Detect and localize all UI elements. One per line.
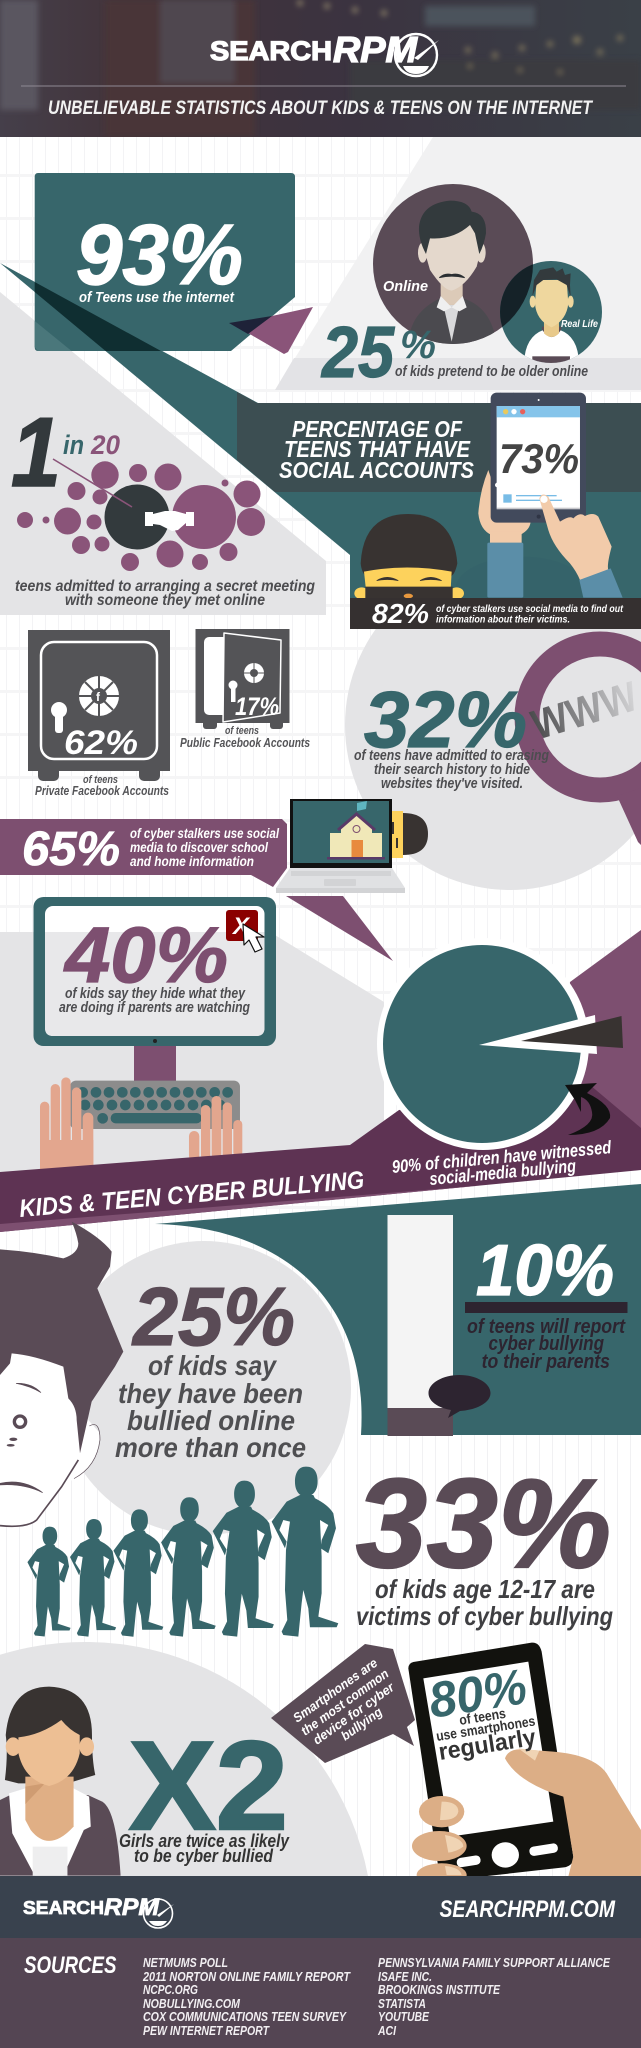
73% figure: 73% [499, 435, 579, 482]
panel: 10% will report: cyber bullying [488, 1333, 604, 1355]
bar gauge 10% [388, 1215, 453, 1436]
banner: 65% of cyber stalkers: 65% [22, 823, 120, 876]
stat: 32% erased history: 32% [364, 675, 527, 764]
monitor: 40% hide what they do [34, 897, 276, 1081]
man illustration [408, 201, 497, 347]
icon: handshake [145, 511, 194, 531]
sleeves [487, 543, 523, 598]
sources column two: ACI [377, 2023, 396, 2038]
footer logo [23, 1894, 174, 1928]
sources column two: YOUTUBE [378, 2009, 429, 2024]
93% caption: of Teens use the internet [79, 290, 235, 306]
stat: 1 in 20: in [63, 430, 84, 460]
stat: 25% bullied online: 25% [131, 1270, 295, 1363]
keyboard and hands [40, 1077, 242, 1169]
phone held in hand [408, 1643, 641, 1887]
heading: kids and teen cyber bullying: KIDS & TEEN CYBER BULLYING [18, 1166, 365, 1223]
safe: public facebook accounts 17%: 17% [235, 693, 279, 721]
large grey circle 32% backdrop [345, 560, 641, 890]
stat: 32% erased history [354, 675, 549, 792]
monitor: 40% hide what they do: 40% [63, 910, 228, 999]
stat: 33% victims: 33% [356, 1453, 611, 1594]
monitor: 40% hide what they do: of kids say they hide what they [65, 985, 246, 1002]
grey panel: secret meeting backdrop [0, 292, 326, 615]
icon: close button with cursor [226, 910, 264, 952]
caption: secret meeting [15, 578, 315, 609]
stat: 25% pretend older: % [400, 323, 436, 367]
stat: girls x2: Girls are twice as likely [119, 1830, 290, 1851]
sources column one [142, 1955, 351, 2038]
speech bubble: smartphones: bullying [338, 1704, 385, 1743]
stat: 25% bullied online: more than once [115, 1432, 306, 1463]
logo [210, 29, 439, 76]
sources column one: NOBULLYING.COM [143, 1996, 241, 2011]
speech bubble: smartphones: Smartphones are [290, 1655, 380, 1725]
sources column one: 2011 NORTON ONLINE FAMILY REPORT [142, 1969, 351, 1984]
stat: 25% bullied online: bullied online [127, 1405, 295, 1436]
stat: 80% on phone screen: 80% [425, 1658, 531, 1729]
safe: public facebook accounts 17%: of teens [225, 725, 259, 737]
safe: public facebook accounts 17%: Public Facebook Accounts [180, 736, 310, 750]
sources column one: PEW INTERNET REPORT [143, 2023, 270, 2038]
caption: 90% witnessed: social-media bullying [429, 1156, 577, 1189]
icon: speech bubble [428, 1375, 490, 1418]
stat: 25% pretend older: of kids pretend to be older online [395, 364, 588, 380]
sources heading: SOURCES [24, 1952, 116, 1979]
silhouettes: six kids [27, 1467, 338, 1637]
stat: 25% bullied online: of kids say [148, 1350, 277, 1381]
bubble cluster with handshake [17, 459, 265, 571]
header photo backdrop [0, 0, 641, 137]
banner: 65% of cyber stalkers: of cyber stalkers use social [130, 825, 280, 841]
footer logo: SEARCH [23, 1898, 104, 1918]
safe: private facebook accounts 62%: f [96, 690, 101, 704]
ninja stalker [354, 514, 464, 599]
panel: 10% will report: of teens will report [467, 1316, 626, 1338]
right hand [189, 1096, 242, 1161]
stat: 25% bullied online [115, 1270, 306, 1463]
stat: 32% erased history: of teens have admitted to erasing [354, 747, 549, 764]
stat: 80% on phone screen: use smartphones [435, 1712, 536, 1744]
safe: private facebook accounts 62%: of teens [83, 774, 118, 786]
banner: 65% of cyber stalkers: media to discover school [130, 839, 269, 855]
tablet body [491, 393, 586, 523]
tablet with hands [455, 393, 623, 623]
boy illustration [524, 267, 579, 363]
caption: 90% witnessed [391, 1137, 613, 1189]
stat: 25% pretend older [320, 313, 588, 393]
left hand [40, 1077, 93, 1169]
banner: 65% of cyber stalkers: and home information [130, 853, 254, 869]
stat: girls x2: to be cyber bullied [134, 1845, 274, 1866]
stat: 80% on phone screen [425, 1658, 538, 1766]
left hand [478, 470, 531, 535]
sources column one: NCPC.ORG [143, 1982, 198, 1997]
banner: 65% of cyber stalkers [0, 819, 287, 887]
safe: public facebook accounts 17% [180, 629, 310, 750]
heading: SOCIAL ACCOUNTS [279, 457, 475, 483]
footer: sources [0, 1938, 641, 2048]
stat: girls x2: X2 [129, 1715, 288, 1856]
speech bubble: smartphones: the most common [298, 1666, 391, 1738]
label: real life: Real Life [561, 318, 598, 330]
safe: private facebook accounts 62%: 62% [64, 724, 138, 762]
heading [279, 416, 475, 483]
stat: 33% victims: of kids age 12-17 are [375, 1574, 595, 1604]
right hand [539, 495, 612, 580]
speech bubble: smartphones: device for cyber [310, 1679, 398, 1747]
safe: private facebook accounts 62%: Private Facebook Accounts [35, 784, 169, 798]
panel: 10% will report: 10% [476, 1231, 614, 1311]
purple speech tail [286, 896, 393, 961]
logo: RPM [333, 29, 418, 70]
panel: 10% will report [155, 1184, 641, 1436]
illustration: sad boy head [0, 1222, 123, 1526]
stat: 1 in 20 [11, 397, 120, 507]
speech bubble: smartphones [271, 1644, 415, 1763]
purple diagonal band [0, 930, 641, 1232]
stat: 1 in 20: 20 [90, 430, 120, 460]
stat: 32% erased history: their search history to hide [374, 761, 530, 778]
pie chart: 90% witnessed bullying [377, 938, 623, 1150]
bar: 82% cyber stalkers: information about their victims. [436, 614, 570, 626]
stat: 25% pretend older: 25 [320, 313, 395, 393]
safe: private facebook accounts 62% [28, 630, 170, 798]
sources column two: STATISTA [378, 1996, 426, 2011]
header banner [0, 0, 641, 137]
icon: close button with cursor: X [231, 913, 251, 940]
icon: magnifying glass with www [526, 644, 641, 845]
teal diagonal band [0, 263, 641, 629]
heading: PERCENTAGE OF [292, 416, 463, 442]
circle: real life persona [500, 261, 602, 363]
hand [505, 1749, 641, 1877]
icon: ninja peeking behind laptop [392, 811, 428, 858]
logo: SEARCH [210, 36, 332, 66]
caption: secret meeting: with someone they met online [65, 592, 265, 609]
stat: 80% on phone screen: regularly [437, 1724, 538, 1766]
stat: 32% erased history: websites they've visited. [381, 775, 523, 792]
bar: 82% cyber stalkers [350, 598, 641, 629]
93% figure: 93% [76, 208, 243, 303]
heading: TEENS THAT HAVE [284, 436, 471, 462]
circle: online persona [373, 184, 533, 347]
stat: 25% bullied online: they have been [118, 1378, 303, 1409]
panel: percentage of teens with social accounts [237, 392, 641, 492]
sources column two: BROOKINGS INSTITUTE [378, 1982, 500, 1997]
label: online: Online [383, 278, 428, 295]
caption: secret meeting: teens admitted to arranging a secret meeting [15, 578, 315, 595]
monitor: 40% hide what they do: are doing if parents are watching [59, 999, 250, 1016]
stat: 1 in 20: 1 [11, 397, 61, 507]
bar: 82% cyber stalkers: 82% [372, 598, 429, 629]
sources column one: COX COMMUNICATIONS TEEN SURVEY [143, 2009, 347, 2024]
speech tail of 93% panel [229, 307, 313, 354]
illustration: woman [0, 1687, 121, 1876]
panel: 93% of teens [35, 173, 295, 351]
grey circle: girls backdrop [0, 1642, 368, 1876]
sources column two: ISAFE INC. [378, 1969, 432, 1984]
sources column two [377, 1955, 610, 2038]
footer: logo and url [0, 1876, 641, 1938]
sources column one: NETMUMS POLL [143, 1955, 228, 1970]
stat: 80% on phone screen: of teens [458, 1705, 507, 1728]
school building [327, 801, 385, 860]
panel: 10% will report: to their parents [482, 1351, 610, 1373]
icon: laptop with school [276, 799, 405, 893]
light grey backdrop top right [275, 137, 641, 390]
footer logo: RPM [104, 1894, 160, 1921]
grey circle: 25% bullied [57, 1241, 351, 1535]
grey backdrop behind monitor [0, 932, 384, 1180]
